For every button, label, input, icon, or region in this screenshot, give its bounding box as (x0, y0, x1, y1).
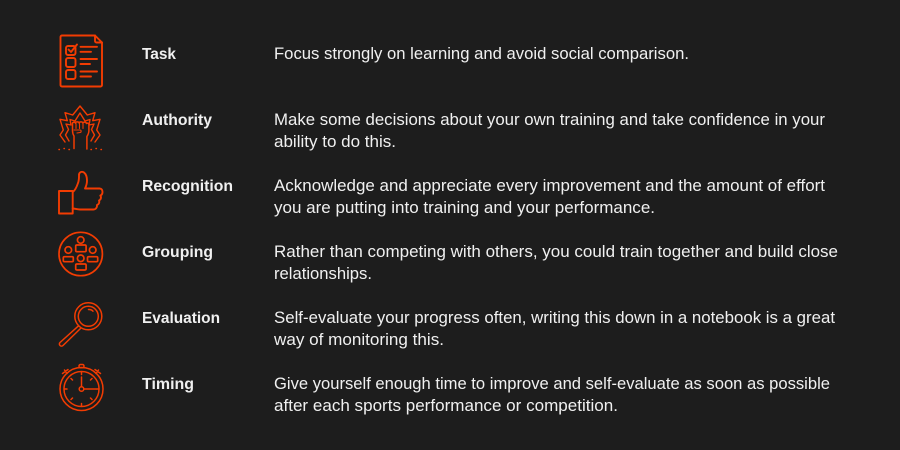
icon: evaluation magnifying glass (59, 303, 102, 346)
icon: authority raised fist (59, 106, 101, 150)
row: recognition: Acknowledge and appreciate every improvement and the amount of effort (274, 177, 825, 195)
row: recognition: Recognition (142, 178, 233, 195)
row: grouping (142, 243, 838, 283)
row: evaluation: way of monitoring this. (273, 331, 444, 349)
icon: task checklist (60, 36, 102, 86)
row: recognition (142, 177, 825, 217)
row: evaluation: Evaluation (142, 310, 220, 327)
row: authority: ability to do this. (274, 133, 396, 151)
row: authority (142, 111, 826, 151)
icon: timing stopwatch (60, 364, 103, 410)
row: grouping: relationships. (274, 265, 372, 283)
row: grouping: Rather than competing with others, you could train together and build close (274, 243, 838, 261)
icon: grouping circle of people (59, 232, 102, 276)
icon: recognition thumbs up (59, 172, 102, 214)
row: evaluation: Self-evaluate your progress often, writing this down in a notebook is a great (274, 309, 835, 327)
row: authority: Make some decisions about your own training and take confidence in your (274, 111, 826, 129)
row: task: Focus strongly on learning and avoid social comparison. (274, 45, 689, 63)
row: timing: Timing (142, 376, 194, 393)
row: timing: Give yourself enough time to improve and self-evaluate as soon as possible (274, 375, 830, 393)
row: evaluation (142, 309, 835, 349)
row: timing: after each sports performance or competition. (274, 397, 618, 415)
row: grouping: Grouping (142, 244, 213, 261)
row: recognition: you are putting into training and your performance. (274, 199, 655, 217)
row: task: Task (142, 46, 176, 63)
row: authority: Authority (142, 112, 212, 129)
row: timing (142, 375, 830, 415)
